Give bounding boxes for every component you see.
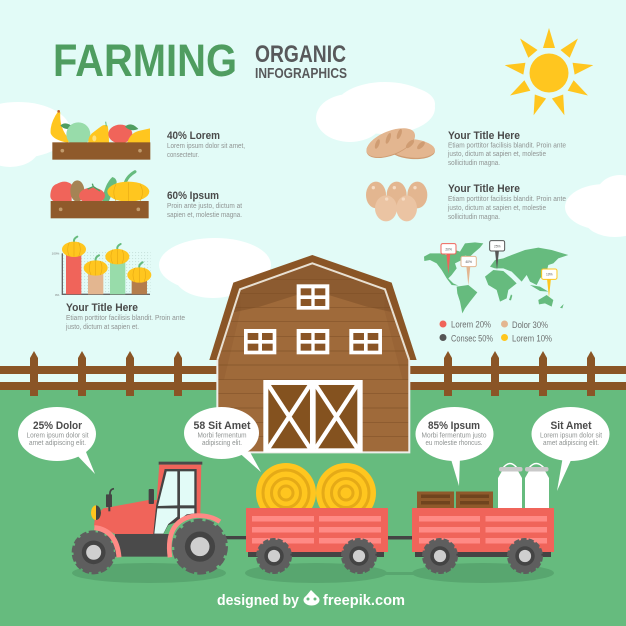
text: 40% Lorem: Lorem ipsum dolor sit amet, bbox=[167, 143, 245, 150]
fence bbox=[0, 351, 626, 396]
trailer: milk and crates bbox=[412, 508, 554, 573]
text: bread title: Etiam porttitor facilisis blandit. Proin ante bbox=[448, 142, 566, 150]
cloud: right bbox=[565, 175, 626, 237]
cloud: top left bbox=[0, 102, 70, 167]
map legend: Lorem 10% bbox=[512, 334, 552, 344]
bubble: 25% Dolor bbox=[18, 407, 96, 474]
bubble: 25% Dolor: Lorem ipsum dolor sit bbox=[26, 432, 89, 440]
vehicle shadows bbox=[72, 563, 554, 583]
hay bales bbox=[256, 463, 376, 523]
bubble: 25% Dolor: 25% Dolor bbox=[33, 420, 83, 432]
text: 40% Lorem: 40% Lorem bbox=[167, 130, 220, 142]
tractor bbox=[73, 462, 247, 573]
barn window: centre bbox=[297, 329, 329, 354]
text: 40% Lorem: consectetur. bbox=[167, 152, 199, 159]
text: 40% Lorem bbox=[167, 130, 245, 159]
bubble: 58 Sit Amet: 58 Sit Amet bbox=[194, 420, 251, 432]
bubble: 85% Ipsum: Morbi fermentum justo bbox=[422, 432, 487, 440]
barn window: right bbox=[349, 329, 382, 354]
title: FARMING bbox=[53, 35, 237, 86]
text: chart caption: Etiam porttitor facilisis blandit. Proin ante bbox=[66, 315, 185, 322]
crates bbox=[417, 492, 493, 508]
barn window: left bbox=[244, 329, 276, 354]
bubble: Sit Amet: Lorem ipsum dolor sit bbox=[540, 432, 602, 440]
bubble: 25% Dolor: amet adipiscing elit. bbox=[29, 440, 86, 447]
trailer: hay bbox=[246, 508, 388, 573]
barn bbox=[209, 255, 417, 452]
map legend: Dolor 30% bbox=[512, 320, 548, 330]
map legend: Consec 50% bbox=[451, 334, 493, 344]
footer credit bbox=[217, 590, 405, 609]
cloud: top centre bbox=[316, 82, 435, 142]
icon: vegetable crate bbox=[50, 172, 149, 218]
barn window: loft bbox=[297, 284, 329, 310]
bubble: 58 Sit Amet bbox=[184, 407, 261, 472]
map pin: 25%: 25% bbox=[494, 244, 501, 248]
text: eggs title bbox=[447, 183, 566, 221]
icon: sun bbox=[504, 28, 594, 117]
map legend: Lorem 20% bbox=[451, 320, 491, 330]
text: 60% Ipsum: 60% Ipsum bbox=[167, 190, 219, 202]
text: 60% Ipsum bbox=[167, 190, 242, 219]
title: INFOGRAPHICS bbox=[255, 65, 347, 82]
chart: pumpkin bar chart: 100% bbox=[52, 251, 60, 255]
chart: pumpkin bar chart bbox=[52, 237, 151, 297]
barn roof bbox=[209, 255, 417, 360]
text: bread title bbox=[447, 130, 566, 167]
bubble: 58 Sit Amet: adipiscing elit. bbox=[202, 440, 242, 447]
ground bbox=[0, 390, 626, 626]
map legend bbox=[440, 320, 552, 344]
milk cans bbox=[498, 464, 549, 508]
title: ORGANIC bbox=[255, 41, 346, 68]
text: eggs title: Etiam porttitor facilisis blandit. Proin ante bbox=[448, 196, 566, 203]
bubble: Sit Amet bbox=[532, 407, 610, 491]
text: 60% Ipsum: sapien et, molestie magna. bbox=[167, 212, 242, 219]
map pin: 10%: 10% bbox=[546, 273, 553, 277]
barn wall bbox=[213, 263, 413, 452]
bubble: 58 Sit Amet: Morbi fermentum bbox=[198, 432, 247, 440]
text: bread title: justo, dictum at sapien et, molestie bbox=[447, 151, 546, 158]
chart: pumpkin bar chart: 0% bbox=[55, 293, 60, 297]
world map bbox=[424, 241, 568, 313]
footer credit: designed by bbox=[217, 592, 300, 609]
text: 60% Ipsum: Proin ante justo, dictum at bbox=[167, 203, 242, 210]
bubble: 85% Ipsum: eu molestie rhoncus. bbox=[426, 440, 483, 447]
text: chart caption bbox=[65, 302, 185, 331]
barn door bbox=[263, 380, 363, 452]
cloud: middle bbox=[159, 238, 271, 298]
text: eggs title: sollicitudin magna. bbox=[448, 214, 500, 221]
icon: bread bbox=[362, 122, 436, 164]
footer credit: freepik.com bbox=[323, 592, 405, 609]
text: eggs title: justo, dictum at sapien et, molestie bbox=[447, 205, 546, 212]
icon: fruit crate bbox=[51, 110, 150, 160]
text: eggs title: Your Title Here bbox=[448, 183, 520, 195]
text: bread title: sollicitudin magna. bbox=[448, 160, 500, 167]
map pin: 40%: 40% bbox=[465, 260, 472, 264]
text: chart caption: Your Title Here bbox=[66, 302, 138, 314]
text: chart caption: justo, dictum at sapien et. bbox=[65, 324, 139, 331]
bubble: Sit Amet: amet adipiscing elit. bbox=[543, 440, 599, 447]
trailer hitch bbox=[388, 536, 412, 540]
bubble: Sit Amet: Sit Amet bbox=[550, 420, 592, 432]
bubble: 85% Ipsum bbox=[416, 407, 494, 486]
icon: eggs bbox=[366, 182, 427, 221]
map pin: 20%: 20% bbox=[445, 247, 452, 251]
bubble: 85% Ipsum: 85% Ipsum bbox=[428, 420, 480, 432]
text: bread title: Your Title Here bbox=[448, 130, 520, 142]
